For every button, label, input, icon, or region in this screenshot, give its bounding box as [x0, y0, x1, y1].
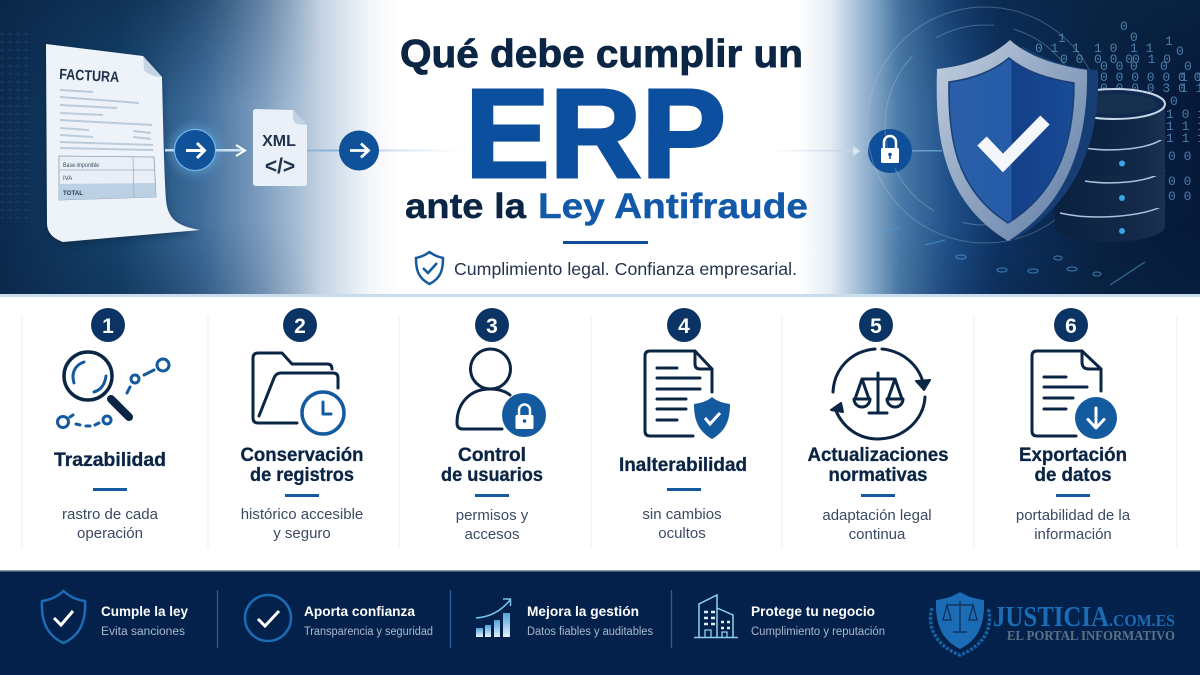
- panel: requirements: [0, 297, 1200, 571]
- tagline: [416, 252, 797, 284]
- binary data background: 1: [1165, 34, 1173, 49]
- item 6: Exportación de datos: información: [1034, 526, 1112, 543]
- invoice totals table: TOTAL: [63, 190, 83, 197]
- binary data background: 0: [1130, 59, 1138, 74]
- item 5: Actualizaciones normativas: adaptación legal: [822, 507, 932, 524]
- binary data background: 0: [1130, 30, 1138, 45]
- binary data background: 0: [1176, 44, 1184, 59]
- invoice totals table: [59, 156, 156, 200]
- logo: Justicia.com.es: [930, 592, 1175, 655]
- icon: database cylinders: [1055, 89, 1165, 242]
- title: [400, 33, 808, 244]
- item 1: Trazabilidad: operación: [77, 525, 143, 542]
- item 1: Trazabilidad: [54, 308, 169, 542]
- item 5: Actualizaciones normativas: continua: [849, 526, 906, 543]
- orbit rings behind shield: [867, 7, 1103, 243]
- panel: footer benefits: [0, 570, 1200, 675]
- binary data background: 0 0: [1060, 52, 1083, 67]
- icon: document with shield: [645, 351, 730, 439]
- arrow: invoice to XML: [165, 126, 245, 174]
- item 2: Conservación de registros: [240, 308, 364, 542]
- icon: XML file: XML: [262, 133, 296, 150]
- item 4: Inalterabilidad: 4: [678, 315, 690, 338]
- benefit: Protege tu negocio: Cumplimiento y reputación: [751, 626, 885, 638]
- benefit: Protege tu negocio: Protege tu negocio: [751, 604, 875, 619]
- benefit: Cumple la ley: Cumple la ley: [101, 604, 188, 619]
- item 3: Control de usuarios: 3: [486, 315, 498, 338]
- item 5: Actualizaciones normativas: Actualizaciones: [808, 445, 948, 466]
- icon: document with download: [1032, 351, 1117, 439]
- item 3: Control de usuarios: de usuarios: [441, 465, 543, 486]
- item 5: Actualizaciones normativas: [808, 308, 948, 543]
- benefit: Protege tu negocio: [694, 595, 885, 638]
- item 1: Trazabilidad: Trazabilidad: [54, 450, 166, 471]
- item 4: Inalterabilidad: [619, 308, 747, 542]
- binary data background: 1 1: [1130, 41, 1154, 56]
- binary data background: 0 1: [1035, 41, 1059, 56]
- binary data background: 0 0 0: [1094, 52, 1133, 67]
- icon: XML file: </>: [265, 155, 295, 178]
- title: Ley Antifraude: [538, 187, 808, 226]
- invoice text lines: [60, 90, 153, 150]
- item 3: Control de usuarios: [441, 308, 546, 543]
- benefit: Aporta confianza: Aporta confianza: [304, 604, 415, 619]
- icon: scales in refresh loop: [831, 349, 930, 439]
- item 3: Control de usuarios: accesos: [464, 526, 520, 543]
- item 2: Conservación de registros: y seguro: [273, 525, 331, 542]
- item 5: Actualizaciones normativas: normativas: [828, 465, 928, 486]
- binary data background: 1: [1058, 31, 1066, 46]
- item 6: Exportación de datos: de datos: [1034, 465, 1112, 486]
- item 3: Control de usuarios: Control: [458, 445, 526, 466]
- benefit: Cumple la ley: [42, 591, 188, 643]
- item 6: Exportación de datos: portabilidad de la: [1016, 507, 1131, 524]
- title: ante la: [405, 187, 527, 226]
- benefit: Mejora la gestión: Mejora la gestión: [527, 604, 639, 619]
- hero banner background: [0, 0, 1200, 297]
- benefit: Mejora la gestión: Datos fiables y auditables: [527, 626, 653, 638]
- benefit: Mejora la gestión: [476, 599, 653, 638]
- binary data background: 1 0: [1094, 41, 1117, 56]
- binary data background: 0 0 0 0 0 0 0: [1100, 70, 1200, 85]
- icon: shield with check: [937, 40, 1098, 241]
- item 4: Inalterabilidad: sin cambios: [642, 506, 722, 523]
- benefit: Aporta confianza: [245, 595, 433, 641]
- invoice totals table: IVA: [63, 176, 72, 182]
- item 2: Conservación de registros: de registros: [250, 465, 354, 486]
- binary data background: 0: [1160, 59, 1168, 74]
- tagline: Cumplimiento legal. Confianza empresarial.: [454, 259, 797, 279]
- item 6: Exportación de datos: 6: [1065, 315, 1077, 338]
- item 3: Control de usuarios: permisos y: [456, 507, 529, 524]
- benefit: Aporta confianza: Transparencia y seguridad: [304, 626, 433, 638]
- item 4: Inalterabilidad: Inalterabilidad: [619, 455, 747, 476]
- binary data background: 0 0 0 0 3 0: [1100, 81, 1186, 96]
- binary data background: [1035, 19, 1200, 204]
- logo: Justicia.com.es: EL PORTAL INFORMATIVO: [1007, 629, 1175, 644]
- binary data background: 1: [1072, 41, 1080, 56]
- item 4: Inalterabilidad: ocultos: [658, 525, 706, 542]
- title: Qué debe cumplir un: [400, 33, 803, 76]
- item 6: Exportación de datos: Exportación: [1019, 445, 1127, 466]
- item 2: Conservación de registros: 2: [294, 315, 306, 338]
- icon: XML file: [253, 109, 307, 186]
- binary data background: 0: [1184, 59, 1192, 74]
- binary data background: 0: [1170, 94, 1178, 109]
- heading: ERP: ERP: [465, 63, 726, 204]
- icon: magnifier with trace: [58, 352, 169, 428]
- icon: invoice document: [45, 44, 200, 245]
- item 2: Conservación de registros: histórico accesible: [241, 506, 363, 523]
- invoice totals table: Base imponible: [63, 163, 100, 169]
- item 1: Trazabilidad: 1: [102, 315, 114, 338]
- binary data background: 0: [1120, 19, 1128, 34]
- arrow and lock badge: [770, 129, 942, 173]
- label: FACTURA: FACTURA: [59, 66, 120, 86]
- icon: user with lock: [457, 349, 546, 437]
- item 5: Actualizaciones normativas: 5: [870, 315, 882, 338]
- logo: Justicia.com.es: .COM.ES: [1109, 611, 1175, 630]
- logo: Justicia.com.es: JUSTICIA: [993, 602, 1110, 633]
- item 1: Trazabilidad: rastro de cada: [62, 506, 159, 523]
- item 2: Conservación de registros: Conservación: [240, 445, 364, 466]
- benefit: Cumple la ley: Evita sanciones: [101, 626, 185, 638]
- binary data background: 0 1 0: [1132, 52, 1171, 67]
- item 6: Exportación de datos: [1016, 308, 1131, 543]
- icon: folder with clock: [253, 353, 344, 434]
- binary data background: 0 0: [1100, 59, 1123, 74]
- arrow: XML onward: [307, 130, 468, 170]
